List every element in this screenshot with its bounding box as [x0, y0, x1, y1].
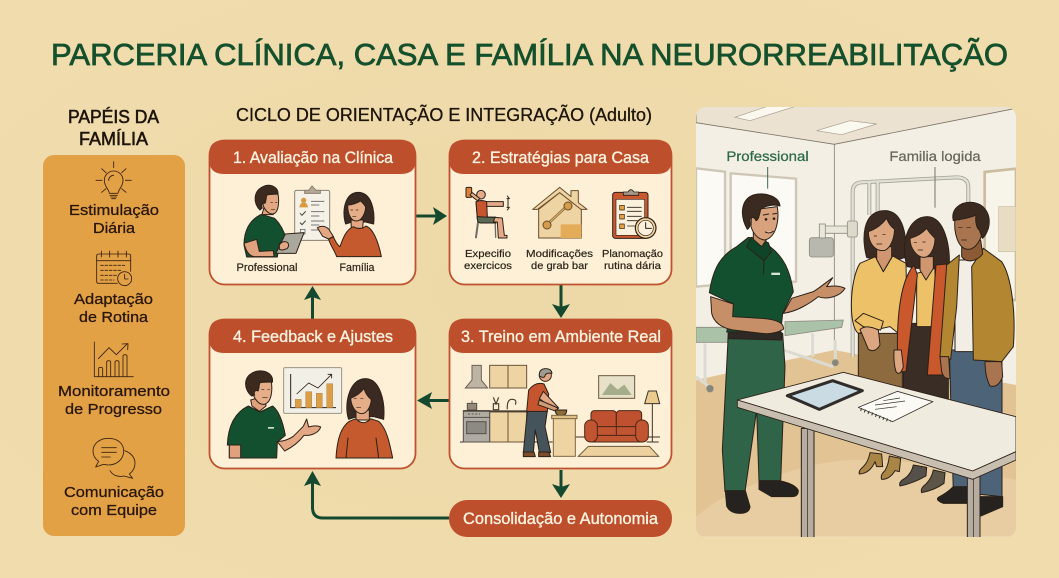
woman — [336, 379, 393, 458]
label: modificações de grab bar — [526, 248, 593, 272]
door at right — [985, 169, 1016, 300]
text: adaptação de rotina — [74, 291, 153, 326]
label: expecifio exercicos — [464, 248, 512, 272]
icon: chat bubbles — [93, 438, 135, 478]
header — [449, 319, 672, 353]
tablet — [787, 381, 862, 409]
text: comunicação com equipe: com Equipe — [71, 502, 157, 519]
equipment rail — [853, 177, 968, 357]
arrow: 4 to 1 — [304, 286, 321, 319]
panel: papéis da família — [43, 155, 185, 536]
floor — [696, 350, 1016, 537]
heading: papéis da família: PAPÉIS DA — [68, 107, 159, 127]
heading text: 1. Avaliação na Clínica — [233, 149, 394, 167]
woman two — [893, 216, 950, 399]
icon: clipboard planner — [613, 190, 656, 238]
photo panel: clinic scene — [696, 106, 1016, 538]
label: planomação rutina dária: rutina dária — [604, 260, 661, 272]
clipboard — [295, 186, 330, 240]
label: planomação rutina dária: Planomação — [602, 248, 663, 260]
person — [523, 369, 559, 457]
label: professional: Professional — [236, 262, 298, 274]
label: professional: Professional — [726, 148, 809, 164]
picture — [599, 376, 635, 398]
lamp — [645, 391, 660, 442]
icon: seated exercise — [466, 187, 509, 238]
text: estimulação diária: Diária — [93, 220, 136, 237]
bowl — [555, 410, 567, 416]
ceiling — [696, 106, 1016, 144]
pill: consolidação e autonomia: Consolidação e Autonomia — [463, 510, 659, 528]
header — [209, 140, 416, 174]
icon: calendar — [97, 251, 132, 286]
man — [244, 185, 304, 257]
rug — [578, 446, 659, 456]
icon: light bulb — [96, 162, 131, 199]
panel: 3 treino em ambiente real — [449, 319, 672, 468]
man with jacket — [940, 202, 1014, 497]
utensils and faucet — [493, 397, 516, 410]
heading: papéis da família — [68, 107, 159, 149]
text: monitoramento de progresso: de Progresso — [65, 401, 162, 418]
text: comunicação com equipe — [64, 484, 164, 519]
text: monitoramento de progresso — [58, 383, 170, 418]
icon: house with grab bar — [533, 187, 587, 238]
arrows — [304, 207, 570, 518]
text: estimulação diária: Estimulação — [69, 202, 159, 219]
header — [449, 140, 672, 174]
title: PARCERIA CLÍNICA, CASA E FAMÍLIA NA NEURORREABILITAÇÃO — [51, 37, 1008, 72]
illustration: kitchen and living room — [460, 365, 660, 457]
sofa — [585, 411, 648, 442]
header — [209, 319, 416, 353]
arrow: 1 to 2 — [416, 207, 447, 225]
arrow: 2 to 3 — [552, 285, 570, 318]
heading: ciclo de orientação: CICLO DE ORIENTAÇÃO E INTEGRAÇÃO (Adulto) — [236, 104, 652, 125]
shoes under table — [859, 453, 1003, 517]
label: professional — [726, 148, 809, 189]
counter — [552, 415, 577, 456]
chart board — [284, 368, 342, 413]
table — [737, 372, 1016, 538]
icon: progress chart — [94, 342, 133, 377]
text: adaptação de rotina: de Rotina — [79, 309, 149, 326]
man — [227, 371, 321, 458]
panel: 1 avaliação na clínica — [209, 140, 416, 284]
label: expecifio exercicos: Expecifio — [465, 248, 511, 260]
text: monitoramento de progresso: Monitoramento — [58, 383, 170, 400]
cabinets — [490, 365, 527, 442]
heading text: 3. Treino em Ambiente Real — [461, 328, 661, 346]
notebook — [858, 391, 933, 422]
professional man — [709, 194, 845, 513]
label: família: Família — [340, 262, 375, 274]
range hood — [465, 365, 488, 388]
arrow: consolidação to 4 — [304, 471, 449, 518]
label: planomação rutina dária — [602, 248, 663, 272]
therapy bed — [696, 320, 843, 392]
pill: consolidação e autonomia — [449, 500, 672, 537]
illustration: professional and family — [244, 185, 381, 257]
heading text: 4. Feedback e Ajustes — [233, 328, 393, 346]
panel: 2 estratégias para casa — [449, 140, 672, 284]
text: comunicação com equipe: Comunicação — [64, 484, 164, 501]
text: estimulação diária — [69, 202, 159, 237]
window — [696, 168, 796, 287]
arrow: 3 to consolidação — [552, 470, 570, 498]
label: expecifio exercicos: exercicos — [464, 260, 512, 272]
text: adaptação de rotina: Adaptação — [74, 291, 153, 308]
panel: 4 feedback e ajustes — [209, 319, 416, 468]
heading text: 2. Estratégias para Casa — [472, 149, 650, 167]
arrow: 3 to 4 — [417, 392, 449, 409]
label: família logida: Familia logida — [889, 148, 981, 164]
woman one — [850, 210, 907, 388]
label: família logida — [889, 148, 981, 208]
heading: papéis da família: FAMÍLIA — [79, 129, 148, 149]
stove — [463, 401, 490, 442]
woman — [317, 192, 381, 257]
label: modificações de grab bar: Modificações — [526, 248, 593, 260]
label: modificações de grab bar: de grab bar — [531, 260, 589, 272]
